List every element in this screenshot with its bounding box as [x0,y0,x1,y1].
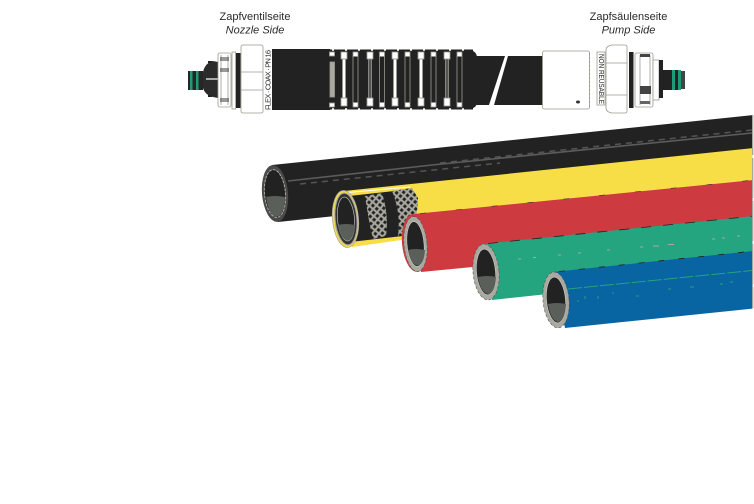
hose assembly diagram [188,45,685,113]
nozzle side coupling [188,45,272,113]
heading: pump side [590,11,667,36]
hose break [476,56,505,105]
braid layer [365,193,387,239]
heading: nozzle side: Nozzle Side [226,24,284,36]
hose end edge [752,115,754,308]
yellow hose cross section [330,148,754,249]
label: flex coax: FLEX · COAX · PN 16 [264,50,272,110]
heading: pump side: Pump Side [602,24,655,36]
black hose with spiral guard [272,49,543,110]
hose assembly infographic [188,12,754,328]
black hose cross section [260,115,754,223]
heading: nozzle side: Zapfventilseite [220,11,290,23]
blue hose cross section [541,251,754,329]
pump side coupling [542,45,685,113]
red hose cross section [400,180,754,273]
label: non reusable: NON REUSABLE [597,54,604,104]
green hose cross section [471,216,754,301]
heading: pump side: Zapfsäulenseite [590,11,667,23]
heading: nozzle side [220,11,290,36]
